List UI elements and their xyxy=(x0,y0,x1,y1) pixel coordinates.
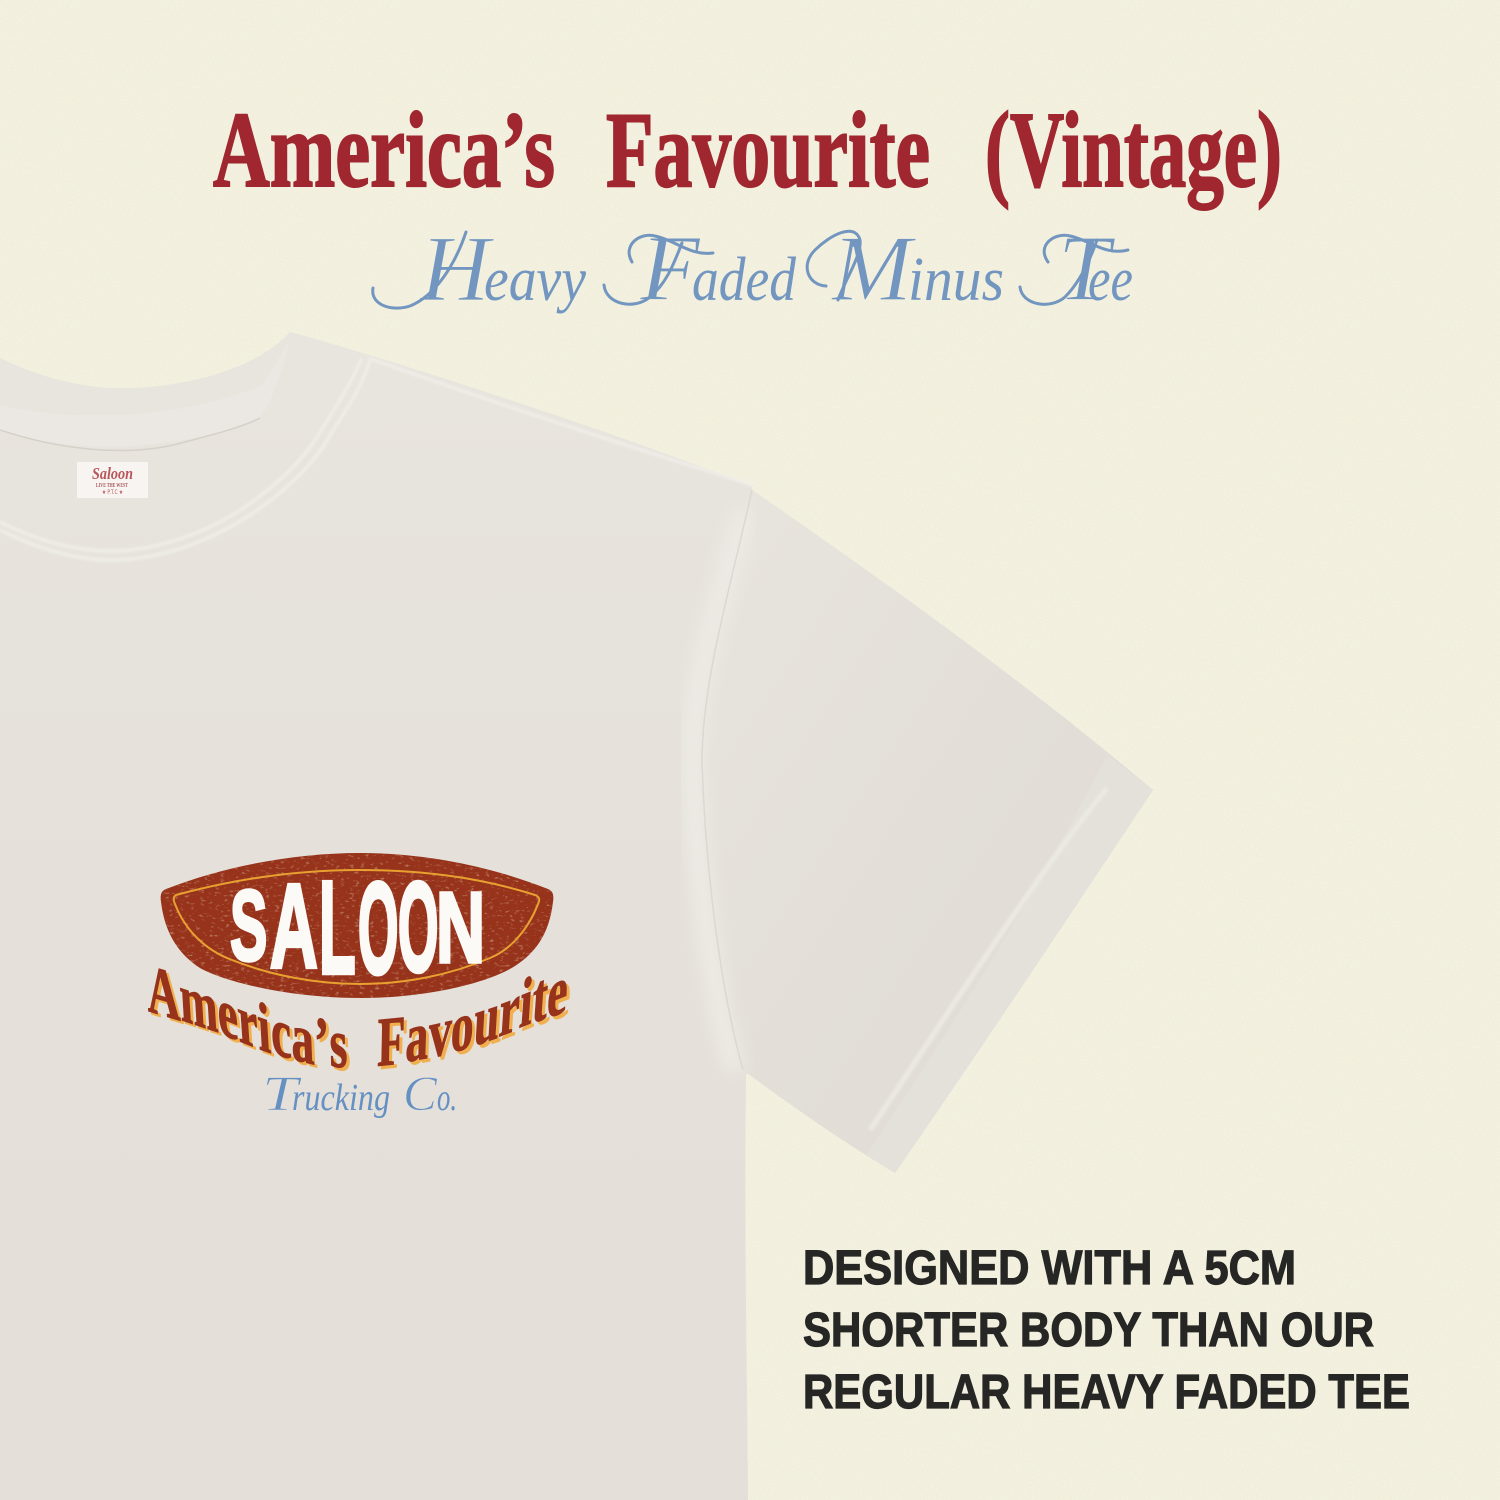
SALOON wordmark: O xyxy=(398,856,438,998)
America's Favourite arc: F xyxy=(377,1000,406,1081)
America's Favourite arc: i xyxy=(255,987,273,1070)
America's Favourite arc shadow: u xyxy=(475,978,505,1064)
badge distress texture xyxy=(161,853,553,998)
America's Favourite arc: a xyxy=(290,997,315,1080)
America's Favourite arc shadow: r xyxy=(500,971,525,1056)
SALOON wordmark: N xyxy=(436,873,485,984)
America's Favourite arc shadow: A xyxy=(148,952,185,1039)
SALOON wordmark: O xyxy=(358,855,398,1001)
neck label: LIVE THE WEST xyxy=(96,483,128,489)
America's Favourite arc shadow: i xyxy=(258,990,276,1073)
America's Favourite arc shadow: e xyxy=(218,975,243,1060)
America's Favourite arc: v xyxy=(427,991,453,1073)
subtitle: inus xyxy=(908,246,1004,314)
Trucking Co.: rucking xyxy=(292,1077,390,1119)
America's Favourite arc: i xyxy=(517,962,535,1044)
collar back rib xyxy=(0,340,290,446)
subtitle: M xyxy=(830,217,917,321)
America's Favourite arc: e xyxy=(215,972,240,1057)
America's Favourite arc: m xyxy=(177,957,220,1048)
America's Favourite arc shadow: r xyxy=(238,983,263,1068)
callout text: REGULAR HEAVY FADED TEE xyxy=(803,1366,1410,1419)
title: (Vintage) xyxy=(985,91,1282,210)
subtitle flourishes xyxy=(373,231,1128,308)
America's Favourite arc shadow: t xyxy=(533,960,553,1043)
America's Favourite arc: e xyxy=(545,950,570,1035)
fade beside sleeve seam xyxy=(692,510,745,1070)
America's Favourite arc shadow: o xyxy=(452,988,479,1071)
America's Favourite arc shadow: i xyxy=(520,965,538,1047)
subtitle: eavy xyxy=(484,246,586,314)
neck label xyxy=(77,462,148,498)
tee body silhouette xyxy=(0,332,760,1500)
America's Favourite arc shadow: F xyxy=(380,1003,409,1084)
America's Favourite arc shadow: s xyxy=(332,1006,351,1086)
America's Favourite arc: c xyxy=(269,991,293,1074)
America's Favourite arc: u xyxy=(472,975,502,1061)
sleeve seam xyxy=(702,490,752,1070)
America's Favourite arc shadow: ’ xyxy=(316,1004,334,1085)
Trucking Co.: T xyxy=(262,1065,302,1121)
America's Favourite arc shadow: v xyxy=(430,994,456,1076)
sleeve hem band xyxy=(866,755,1153,1173)
title: Favourite xyxy=(606,91,930,210)
chest logo xyxy=(145,853,573,1121)
America's Favourite arc shadow: a xyxy=(293,1000,318,1083)
badge inner outline xyxy=(174,870,539,984)
subtitle: aded xyxy=(692,246,797,314)
title xyxy=(213,91,1282,210)
America's Favourite arc shadow: e xyxy=(548,953,573,1038)
Trucking Co.: C xyxy=(403,1065,438,1121)
subtitle: ee xyxy=(1088,246,1133,314)
collar rib bottom edge xyxy=(0,418,260,451)
Trucking Co.: o. xyxy=(437,1077,457,1119)
subtitle: F xyxy=(639,217,702,321)
America's Favourite arc xyxy=(145,949,570,1083)
subtitle xyxy=(373,217,1133,321)
title: America’s xyxy=(213,91,555,210)
America's Favourite arc: r xyxy=(235,980,260,1065)
sleeve panel xyxy=(702,490,1153,1173)
SALOON wordmark: A xyxy=(270,861,318,993)
callout text xyxy=(803,1242,1410,1419)
subtitle: T xyxy=(1058,217,1116,321)
America's Favourite arc: a xyxy=(405,995,430,1077)
America's Favourite arc: A xyxy=(145,949,182,1036)
America's Favourite arc: r xyxy=(497,968,522,1053)
neck label: Saloon xyxy=(92,464,133,483)
subtitle: H xyxy=(418,217,495,321)
America's Favourite arc: ’ xyxy=(313,1001,331,1082)
America's Favourite arc: s xyxy=(329,1003,348,1083)
America's Favourite arc shadow: m xyxy=(180,960,223,1051)
t-shirt xyxy=(0,332,1153,1500)
America's Favourite arc shadow xyxy=(148,952,573,1086)
badge xyxy=(161,853,553,998)
sleeve hem stitch xyxy=(870,788,1107,1130)
America's Favourite arc: o xyxy=(449,985,476,1068)
America's Favourite arc shadow: c xyxy=(272,994,296,1077)
neck label: ★ P.T.C ★ xyxy=(102,489,123,496)
shoulder seam xyxy=(368,358,756,486)
America's Favourite arc shadow: a xyxy=(408,998,433,1080)
callout text: DESIGNED WITH A 5CM xyxy=(803,1242,1296,1295)
SALOON wordmark xyxy=(230,853,485,1001)
callout text: SHORTER BODY THAN OUR xyxy=(803,1304,1374,1357)
collar front seams xyxy=(0,358,370,560)
SALOON wordmark: L xyxy=(319,853,356,1001)
Trucking Co. xyxy=(262,1065,457,1121)
America's Favourite arc: t xyxy=(530,957,550,1040)
SALOON wordmark: S xyxy=(230,871,267,982)
